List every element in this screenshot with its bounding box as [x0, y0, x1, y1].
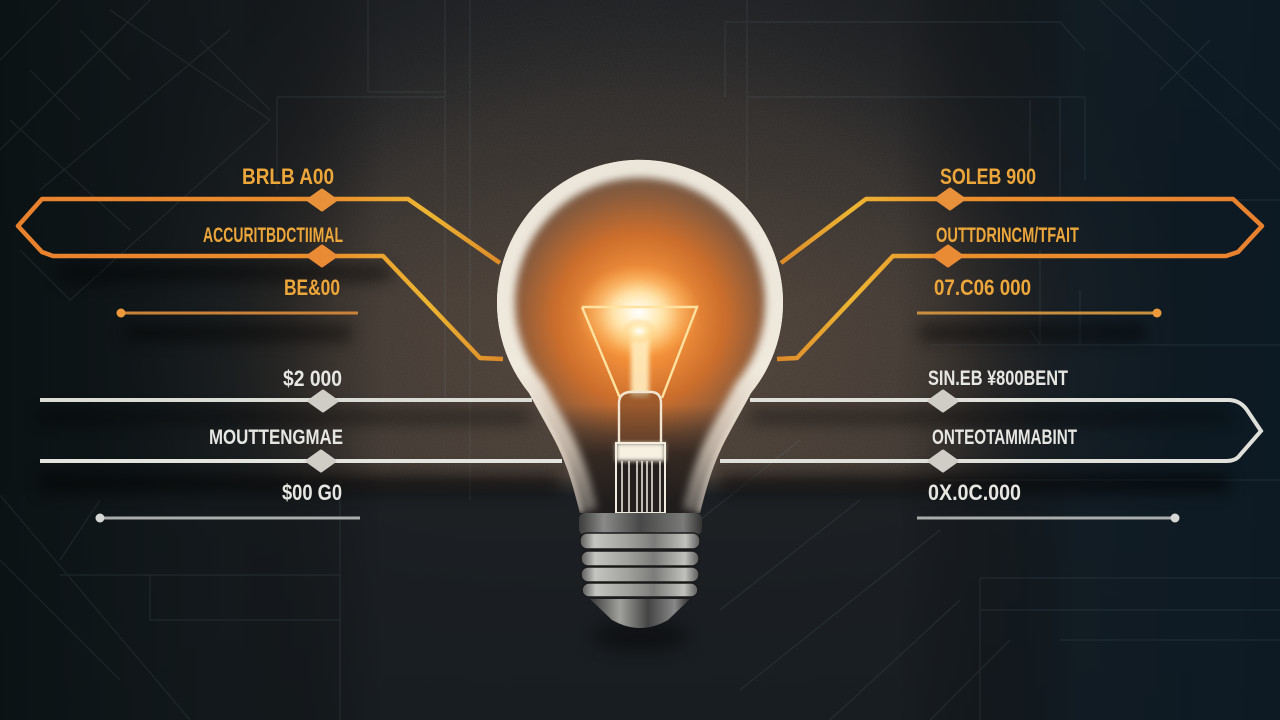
filament glow: [576, 264, 700, 360]
marker: left orange diamond upper: [308, 190, 336, 210]
category label: right orange: OUTTDRINCM/TFAIT: [936, 224, 1079, 247]
short orange bar right: [917, 308, 1162, 318]
category label: left white: MOUTTENGMAE: [209, 426, 343, 449]
panel: upper left orange callouts: [18, 164, 503, 359]
icon: light bulb: [490, 155, 790, 652]
value label: right orange second: 07.C06 000: [934, 275, 1031, 300]
marker: right orange diamond upper: [936, 189, 964, 209]
category label: right white: ONTEOTAMMABINT: [932, 426, 1077, 449]
marker: left white diamond upper: [309, 391, 337, 411]
stem base: [616, 443, 665, 513]
glass capsule: [619, 392, 661, 443]
white line upper left: [40, 398, 532, 402]
marker: right white diamond upper: [929, 391, 957, 411]
short orange bar left: [116, 308, 358, 318]
value label: right white second: 0X.0C.000: [928, 480, 1021, 505]
panel: lower left white callouts: [40, 366, 562, 522]
bulb glass: [490, 155, 790, 520]
value label: left white second: $00 G0: [282, 480, 342, 505]
marker: right white diamond lower: [929, 451, 957, 471]
value label: left orange second: BE&00: [284, 275, 340, 300]
short white bar left: [96, 514, 360, 522]
marker: left orange diamond lower: [308, 246, 336, 266]
white line lower left: [40, 459, 562, 463]
value label: right white first: SIN.EB ¥800BENT: [928, 367, 1068, 390]
orange connector loop left: [18, 199, 503, 359]
value label: left white first: $2 000: [283, 366, 342, 391]
line shadows: [40, 266, 1230, 492]
marker: left white diamond lower: [307, 451, 335, 471]
filament stem: [621, 318, 657, 397]
panel: upper right orange callouts: [777, 164, 1262, 359]
white connector loop right: [720, 400, 1261, 461]
panel: lower right white callouts: [720, 367, 1261, 522]
marker: right orange diamond lower: [934, 246, 962, 266]
base tip: [590, 599, 690, 628]
short white bar right: [917, 514, 1180, 522]
value label: left orange first: BRLB A00: [242, 164, 334, 189]
filament wires: [582, 307, 697, 398]
orange connector loop right: [777, 199, 1262, 359]
category label: left orange: ACCURITBDCTIIMAL: [203, 224, 343, 247]
bulb drop shadow: [592, 620, 688, 652]
value label: right orange first: SOLEB 900: [940, 164, 1036, 189]
screw base: [579, 513, 702, 597]
